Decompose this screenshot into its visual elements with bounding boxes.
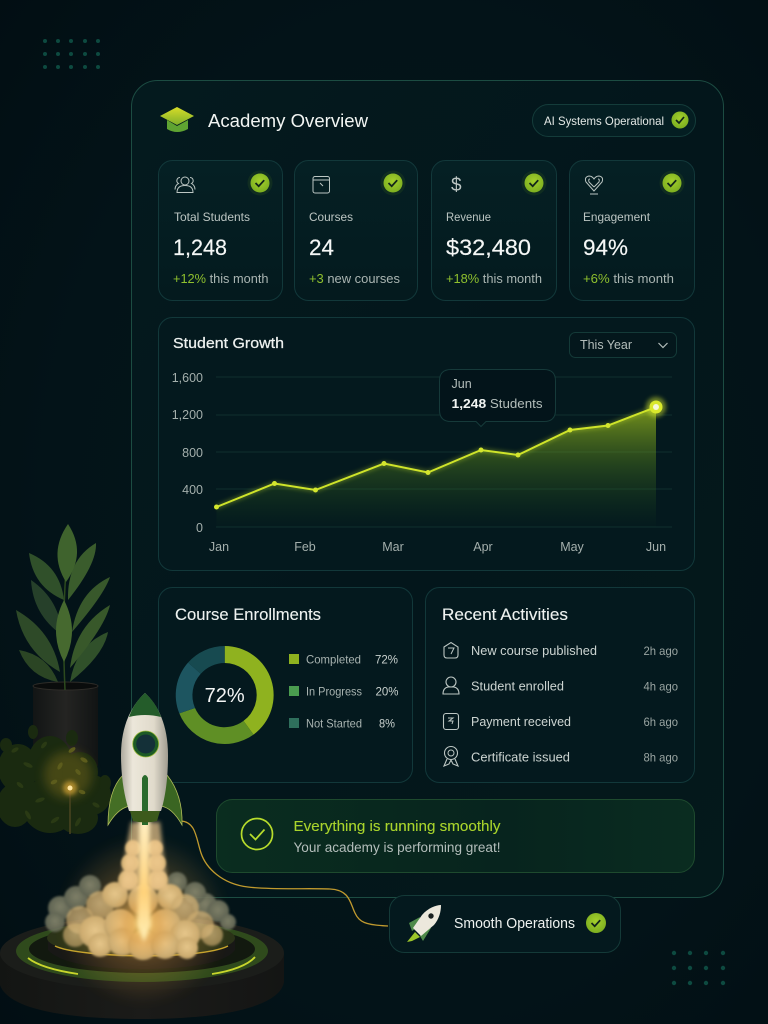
flame beam: [137, 818, 151, 942]
legend: 72%: [375, 652, 398, 666]
legend: In Progress: [306, 684, 362, 698]
line chart: May: [560, 540, 585, 554]
success banner: [216, 800, 694, 872]
tooltip: Jun: [452, 377, 472, 391]
line chart: 1,200: [172, 408, 203, 422]
heading: Recent Activities: [442, 606, 568, 624]
status pill: AI Systems Operational: [544, 114, 664, 128]
line chart: Jan: [209, 540, 229, 554]
activity: certificate issued: 8h ago: [644, 750, 678, 764]
heading: Student Growth: [173, 335, 284, 352]
trend: +18% this month: [446, 272, 542, 286]
panel: recent activities: [426, 588, 694, 782]
value: 94%: [583, 235, 628, 260]
nose cone: [129, 693, 161, 717]
badge: smooth operations: [390, 896, 620, 952]
rocket launch smoke: [45, 818, 236, 1005]
trend: +12% this month: [173, 272, 269, 286]
label: Engagement: [583, 210, 651, 224]
panel: academy dashboard: [132, 80, 724, 898]
line chart: Mar: [382, 540, 404, 554]
legend: Not Started: [306, 716, 362, 730]
activity: certificate issued: Certificate issued: [471, 750, 570, 764]
decorative dot grid top left: [43, 39, 100, 69]
activity: payment received: Payment received: [471, 714, 571, 729]
fins: [108, 775, 130, 825]
connector line: [181, 821, 388, 926]
check badge: [586, 913, 606, 933]
pot: [33, 682, 98, 766]
window: [133, 731, 159, 757]
icon: mini rocket: [407, 905, 441, 942]
plant: [16, 524, 110, 766]
dropdown: [570, 332, 676, 358]
activity: payment received: [444, 714, 678, 730]
icon: students: [175, 177, 195, 192]
value: $32,480: [446, 235, 531, 260]
icon: graduation cap: [160, 107, 194, 132]
panel: courses: [294, 160, 418, 300]
check badge: [522, 170, 546, 196]
icon: dollar: $: [451, 175, 462, 196]
rocket: [108, 693, 182, 825]
line chart: Feb: [294, 540, 316, 554]
legend: 20%: [376, 684, 399, 698]
donut chart: [176, 646, 274, 744]
activity: certificate issued: [444, 746, 678, 766]
activity: new course published: New course published: [471, 643, 597, 658]
check badge: [380, 170, 406, 196]
status pill: [532, 104, 696, 136]
body: [121, 693, 168, 811]
line chart: Apr: [473, 540, 493, 554]
dropdown: This Year: [580, 338, 632, 352]
icon: heart: [585, 176, 603, 194]
activity: new course published: [444, 642, 678, 658]
value: 1,248: [173, 235, 227, 260]
heading: Course Enrollments: [175, 606, 321, 624]
trend: +6% this month: [583, 272, 674, 286]
label: Total Students: [174, 210, 250, 224]
check badge: [248, 170, 272, 196]
tooltip: 1,248 Students: [452, 396, 542, 411]
icon: course book: [313, 176, 330, 193]
activity: student enrolled: 4h ago: [644, 680, 678, 694]
badge: smooth operations: Smooth Operations: [454, 916, 575, 932]
line chart: 400: [182, 483, 203, 497]
launch platform: [0, 916, 284, 1019]
banner headline: Everything is running smoothly: [294, 819, 501, 835]
lamp: [63, 781, 77, 834]
leaves: [16, 524, 110, 690]
activity: student enrolled: [443, 677, 678, 694]
donut chart: 72%: [205, 685, 245, 707]
centre fin and exhaust: [142, 775, 148, 825]
line chart: 0: [196, 521, 203, 535]
legend: Completed: [306, 652, 361, 666]
value: 24: [309, 235, 334, 260]
check badge: [660, 170, 684, 196]
label: Revenue: [446, 210, 491, 224]
panel: student growth: [158, 318, 694, 570]
panel: total students: [158, 160, 282, 300]
activity: student enrolled: Student enrolled: [471, 678, 564, 694]
shrub with lamp: [0, 725, 111, 834]
icon: success check: [242, 818, 272, 850]
activity: payment received: 6h ago: [644, 715, 678, 729]
line chart: 800: [182, 446, 203, 460]
panel: course enrollments: [158, 588, 412, 782]
panel: engagement: [570, 160, 694, 300]
legend: [289, 652, 399, 730]
trend: +3 new courses: [309, 272, 400, 286]
decorative dot grid bottom right: [672, 951, 725, 985]
line chart: Jun: [646, 540, 666, 554]
banner message: Your academy is performing great!: [294, 840, 500, 855]
tooltip: [440, 370, 556, 426]
exhaust plume: [120, 822, 168, 890]
label: Courses: [309, 210, 353, 224]
line chart: [172, 371, 672, 554]
title: Academy Overview: [208, 111, 369, 131]
panel: revenue: [432, 160, 556, 300]
line chart: 1,600: [172, 371, 203, 385]
legend: 8%: [379, 716, 395, 730]
activity: new course published: 2h ago: [644, 644, 678, 658]
